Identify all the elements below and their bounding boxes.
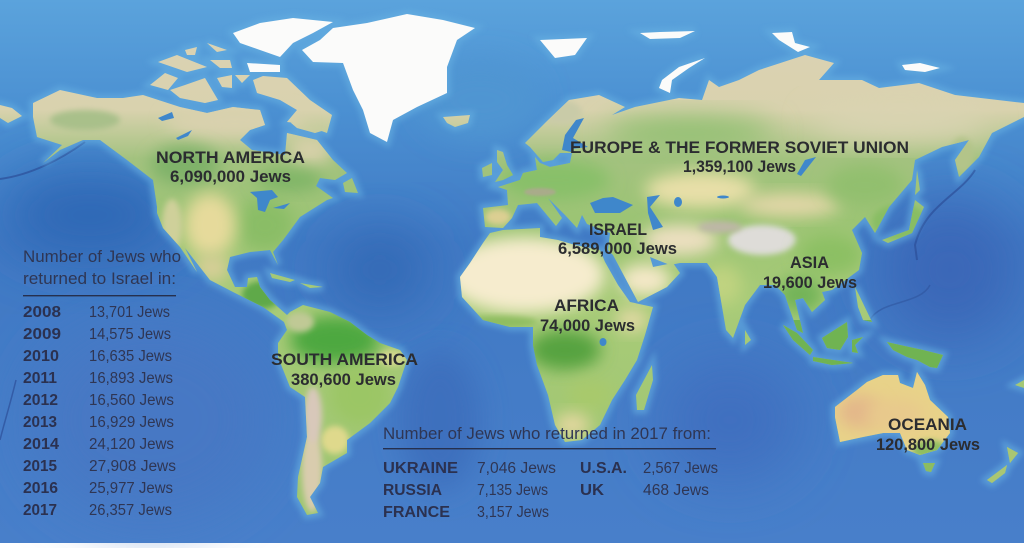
ice caps: Greenland and Arctic islands bbox=[233, 14, 940, 142]
North America colouring bbox=[50, 106, 332, 309]
table rows: years and counts: 2014 bbox=[23, 436, 59, 453]
table rows: years and counts: 24,120 Jews bbox=[89, 436, 174, 453]
label: North America: 6,090,000 Jews bbox=[170, 168, 291, 186]
label: South America: SOUTH AMERICA bbox=[271, 351, 418, 369]
label: Asia: 19,600 Jews bbox=[763, 274, 857, 292]
table rows: years and counts: 2016 bbox=[23, 480, 58, 497]
label: Africa: AFRICA bbox=[554, 297, 619, 315]
inland seas and lakes bbox=[158, 112, 816, 346]
label: North America bbox=[156, 149, 305, 186]
label: South America: 380,600 Jews bbox=[291, 371, 396, 389]
heading: returned to Israel: returned to Israel in: bbox=[23, 270, 176, 288]
table rows: years and counts bbox=[23, 304, 176, 519]
label: Israel bbox=[558, 221, 677, 258]
table rows: years and counts: 2012 bbox=[23, 392, 58, 409]
country rows: RUSSIA bbox=[383, 482, 442, 499]
label: Europe and the former Soviet Union: EUROPE & THE FORMER SOVIET UNION bbox=[570, 139, 909, 157]
country rows: U.S.A. bbox=[580, 460, 627, 477]
Eurasia colouring bbox=[485, 100, 990, 370]
Australia colouring bbox=[830, 370, 1024, 486]
label: Europe and the former Soviet Union: 1,359,100 Jews bbox=[683, 158, 796, 176]
table rows: years and counts: 13,701 Jews bbox=[89, 304, 170, 321]
label: Europe and the former Soviet Union bbox=[570, 139, 909, 176]
table rows: years and counts: 14,575 Jews bbox=[89, 326, 171, 343]
table rows: years and counts: 16,893 Jews bbox=[89, 370, 173, 387]
label: Israel: 6,589,000 Jews bbox=[558, 240, 677, 258]
country rows: 3,157 Jews bbox=[477, 504, 549, 521]
label: Oceania: OCEANIA bbox=[888, 416, 967, 434]
table rows: years and counts: 2008 bbox=[23, 304, 61, 321]
label: South America bbox=[271, 351, 418, 389]
table rows: years and counts: 25,977 Jews bbox=[89, 480, 173, 497]
table rows: years and counts: 2009 bbox=[23, 326, 61, 343]
country rows: UK bbox=[580, 482, 605, 499]
table rows: years and counts: 2017 bbox=[23, 502, 57, 519]
South America colouring bbox=[286, 312, 406, 512]
country rows bbox=[383, 460, 718, 521]
heading: returned in 2017: Number of Jews who returned in 2017 from: bbox=[383, 425, 711, 443]
country rows: 468 Jews bbox=[643, 482, 709, 499]
table rows: years and counts: 2010 bbox=[23, 348, 59, 365]
table rows: years and counts: 16,560 Jews bbox=[89, 392, 174, 409]
label: Oceania bbox=[876, 416, 980, 454]
table rows: years and counts: 2013 bbox=[23, 414, 57, 431]
panel: yearly returns table bbox=[23, 248, 181, 519]
table rows: years and counts: 16,929 Jews bbox=[89, 414, 174, 431]
label: Asia bbox=[763, 254, 857, 292]
label: Oceania: 120,800 Jews bbox=[876, 436, 980, 454]
table rows: years and counts: 27,908 Jews bbox=[89, 458, 176, 475]
label: Asia: ASIA bbox=[790, 254, 829, 272]
heading: returned to Israel bbox=[23, 248, 181, 296]
table rows: years and counts: 16,635 Jews bbox=[89, 348, 172, 365]
table rows: years and counts: 2015 bbox=[23, 458, 57, 475]
country rows: 7,135 Jews bbox=[477, 482, 548, 499]
country rows: 7,046 Jews bbox=[477, 460, 556, 477]
heading: returned to Israel: Number of Jews who bbox=[23, 248, 181, 266]
label: North America: NORTH AMERICA bbox=[156, 149, 305, 167]
country rows: UKRAINE bbox=[383, 460, 458, 477]
table rows: years and counts: 2011 bbox=[23, 370, 57, 387]
panel: 2017 returns by country bbox=[383, 425, 718, 521]
Africa colouring bbox=[445, 237, 648, 437]
label: Israel: ISRAEL bbox=[589, 221, 647, 239]
label: Africa: 74,000 Jews bbox=[540, 317, 635, 335]
label: Africa bbox=[540, 297, 635, 335]
country rows: 2,567 Jews bbox=[643, 460, 718, 477]
table rows: years and counts: 26,357 Jews bbox=[89, 502, 172, 519]
country rows: FRANCE bbox=[383, 504, 450, 521]
